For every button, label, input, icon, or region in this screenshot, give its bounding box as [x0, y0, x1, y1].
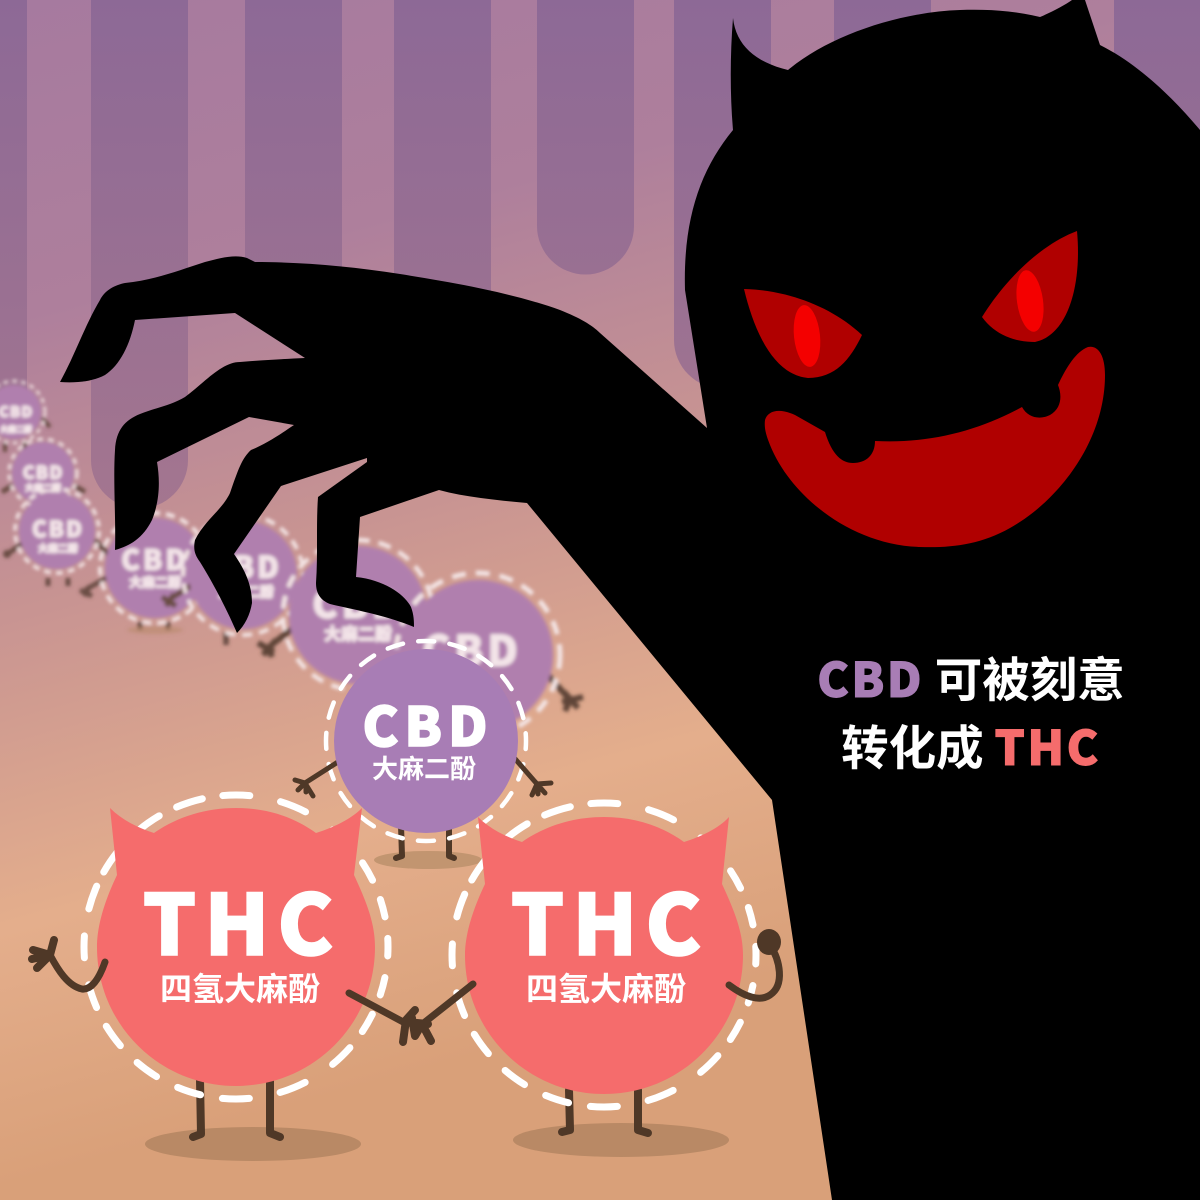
character: far CBD 4: CBD [121, 539, 189, 579]
character: far CBD 5: 大麻二酚 [218, 582, 275, 602]
character: left THC: 四氢大麻酚 [160, 964, 320, 1010]
heading text: CBD 可被刻意 [817, 642, 1125, 711]
label: THC [143, 859, 341, 980]
character: far CBD 3: CBD [32, 512, 84, 544]
label: CBD [363, 683, 493, 762]
body [334, 649, 518, 833]
monster right eye [982, 231, 1078, 342]
background stripes [0, 0, 1200, 508]
character: front CBD [295, 641, 551, 869]
body with horns [97, 808, 375, 1086]
character: far CBD 4: 大麻二酚 [129, 572, 181, 591]
character: left THC [32, 795, 407, 1161]
character: far CBD 5: CBD [210, 543, 282, 587]
monster mouth [765, 347, 1105, 547]
character: far CBD 3 [3, 489, 110, 586]
character: far CBD 3: 大麻二酚 [38, 540, 78, 555]
character: far CBD 1 [0, 381, 50, 452]
label: THC [511, 859, 709, 980]
character: right THC [403, 803, 781, 1157]
arms [425, 945, 779, 1022]
dashed ring [452, 803, 756, 1107]
dashed ring [326, 641, 526, 841]
heading text [817, 642, 1125, 779]
body with horns [465, 817, 743, 1094]
character: front CBD: 大麻二酚 [372, 749, 476, 786]
character: far CBD 4 [80, 513, 210, 634]
shadow [513, 1123, 729, 1157]
shadow [145, 1127, 361, 1161]
heading text: 转化成 THC [841, 710, 1101, 779]
shadow [374, 851, 482, 869]
monster left eye [744, 289, 862, 378]
arms [295, 753, 551, 796]
character: far CBD 7: CBD [422, 618, 522, 679]
arms [32, 940, 407, 1024]
dashed ring [84, 795, 388, 1099]
character: far CBD 6: 大麻二酚 [324, 620, 392, 645]
character: far CBD 2: CBD [23, 459, 63, 485]
clasped hands [403, 1010, 431, 1042]
character: far CBD 2: 大麻二酚 [25, 481, 61, 494]
character: far CBD 1: 大麻二酚 [0, 424, 32, 435]
character: far CBD 7 [396, 573, 583, 737]
character: far CBD 2 [2, 439, 85, 507]
character: right THC: 四氢大麻酚 [526, 964, 686, 1010]
legs [193, 1080, 280, 1137]
legs [562, 1090, 648, 1133]
hand knob [757, 929, 781, 955]
character: far CBD 6 [258, 540, 433, 690]
legs [396, 825, 454, 858]
character: far CBD 5 [162, 515, 303, 645]
character: far CBD 6: CBD [312, 574, 404, 629]
blurred background CBD crowd [0, 381, 583, 737]
